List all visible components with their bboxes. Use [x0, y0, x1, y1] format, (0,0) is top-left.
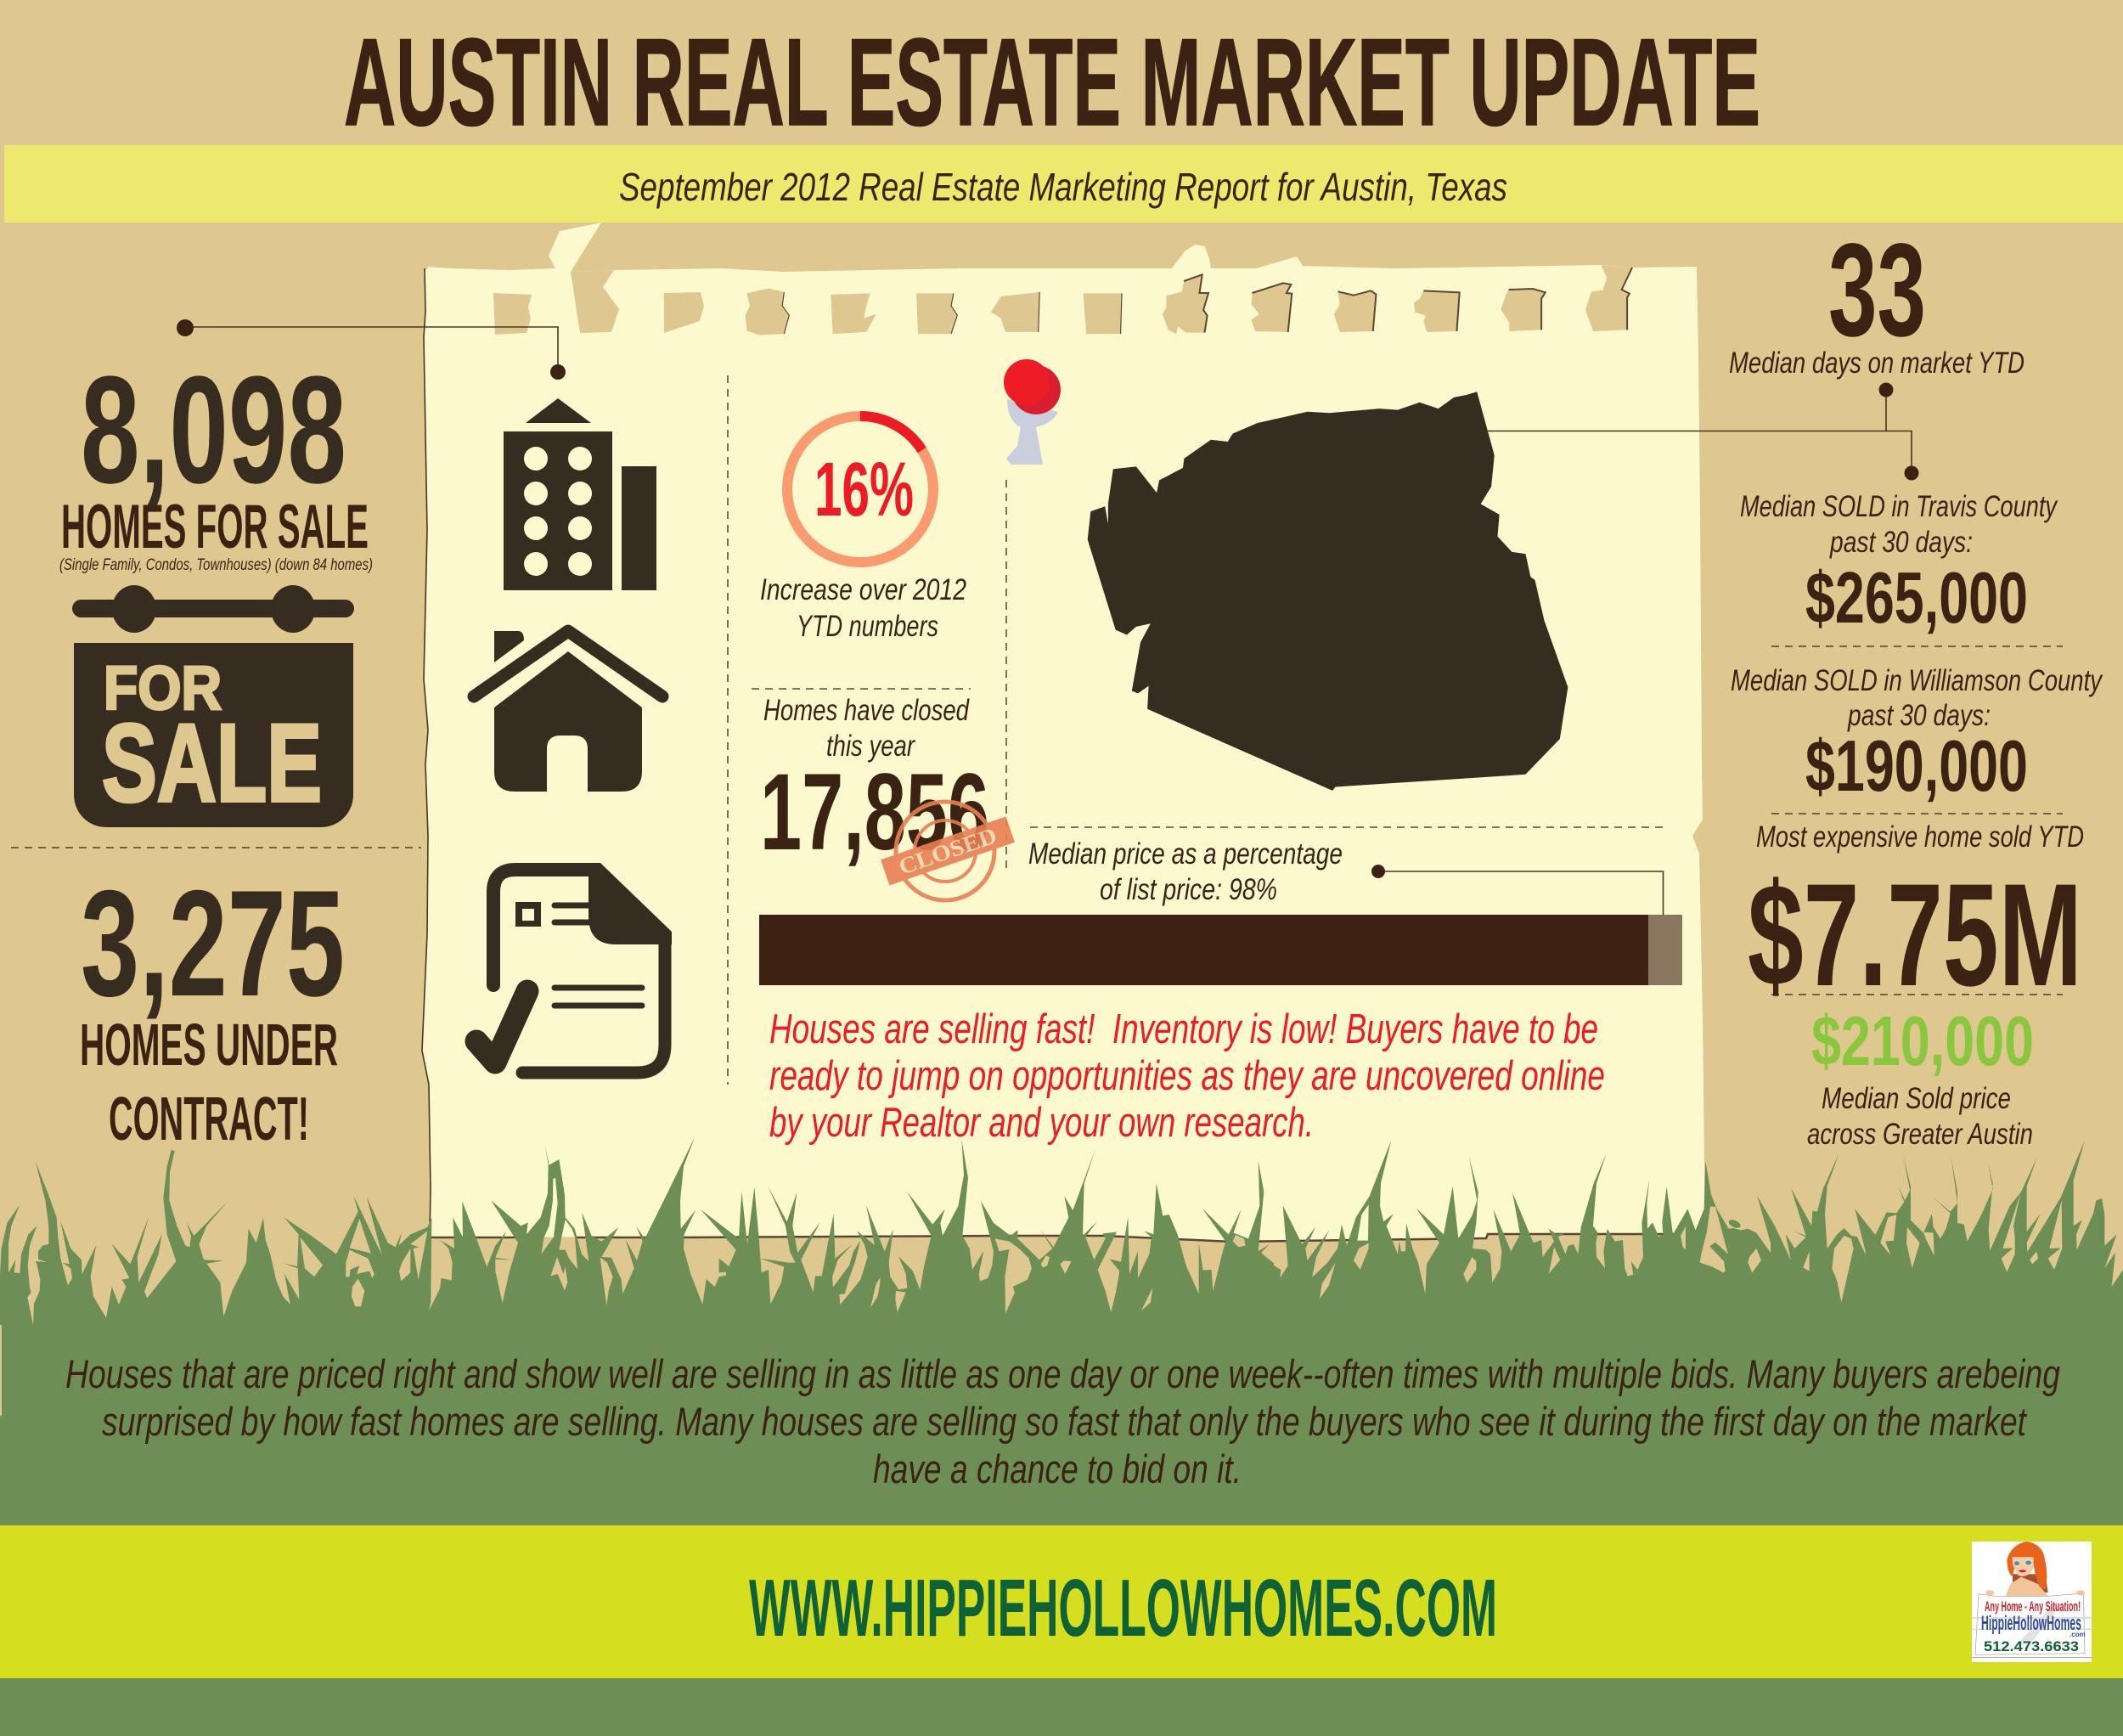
callout: houses are selling fast: ready to jump on opportunities as they are uncovered online — [769, 1053, 1605, 1099]
text: increase over 2012: Increase over 2012 — [760, 573, 966, 606]
connector: map to right-hand stats — [1488, 382, 1919, 481]
text: homes have closed — [763, 694, 970, 763]
website url: WWW.HIPPIEHOLLOWHOMES.COM — [749, 1563, 1497, 1654]
text: bottom paragraph: have a chance to bid on it. — [873, 1446, 1242, 1491]
donut chart: 16 percent: 16% — [814, 448, 914, 533]
callout: houses are selling fast — [769, 1006, 1605, 1146]
text: increase over 2012 — [760, 573, 966, 643]
text: homes have closed: Homes have closed — [763, 694, 970, 727]
stat: Williamson County: $190,000 — [1805, 726, 2028, 807]
icon: house — [474, 631, 662, 792]
logo: Hippie Hollow Homes — [1972, 1542, 2092, 1662]
stat: Travis County: past 30 days: — [1829, 526, 1973, 559]
stat: homes closed: 17,856 — [760, 752, 989, 873]
text: homes have closed: this year — [826, 730, 915, 763]
subtitle band — [4, 145, 2123, 223]
stat: median days on market: 33 — [1828, 217, 1926, 364]
stat: Williamson County — [1731, 664, 2103, 807]
left edge sliver — [0, 1325, 2, 1416]
stat: median days on market: Median days on market YTD — [1729, 347, 2024, 380]
grass — [0, 1136, 2123, 1736]
dashed dividers — [11, 375, 2063, 1085]
stat: median sold price: across Greater Austin — [1807, 1118, 2033, 1151]
icon: document with check mark — [476, 863, 672, 1073]
icon: building — [504, 398, 656, 590]
stat: homes under contract — [80, 859, 345, 1153]
paper torn edge lines — [422, 268, 431, 1237]
note: property types: (Single Family, Condos, Townhouses) (down 84 homes) — [59, 556, 373, 574]
label: contract: CONTRACT! — [109, 1085, 309, 1153]
icon: for sale sign: SALE — [102, 701, 322, 825]
logo: Hippie Hollow Homes: .com — [2070, 1631, 2086, 1638]
paper tears and punched holes — [493, 265, 1632, 335]
stat: median days on market — [1729, 217, 2024, 380]
stat: Williamson County: past 30 days: — [1847, 699, 1991, 732]
logo: Hippie Hollow Homes: 512.473.6633 — [1984, 1638, 2079, 1654]
label: homes under: HOMES UNDER — [80, 1012, 338, 1078]
panel: footer band — [0, 1525, 2123, 1678]
text: median price percent of list — [1028, 837, 1343, 906]
subtitle: September 2012 Real Estate Marketing Report for Austin, Texas — [619, 165, 1507, 209]
icon: for sale sign: FOR — [104, 655, 222, 723]
stat: median sold price: Median Sold price — [1822, 1082, 2011, 1115]
text: median price percent of list: of list price: 98% — [1100, 873, 1277, 906]
connector: homes for sale to building — [177, 319, 566, 380]
icon: red push pin — [1004, 359, 1061, 465]
connector: list price to bar — [1371, 865, 1663, 915]
callout: houses are selling fast: by your Realtor and your own research. — [769, 1100, 1314, 1146]
text: bottom paragraph — [65, 1351, 2060, 1491]
panel: torn notebook paper — [422, 223, 1704, 1242]
donut chart: 16 percent — [787, 416, 933, 562]
stamp: closed — [881, 802, 1015, 900]
text: increase over 2012: YTD numbers — [797, 610, 938, 643]
stat: homes under contract: 3,275 — [81, 859, 345, 1028]
map: Austin area silhouette — [1088, 392, 1568, 791]
stat: Travis County — [1740, 490, 2058, 639]
callout: houses are selling fast: Houses are selling fast! Inventory is low! Buyers have to be — [769, 1006, 1598, 1052]
label: homes for sale: HOMES FOR SALE — [61, 493, 369, 561]
bar chart: 98 percent — [759, 915, 1682, 985]
stat: median sold price — [1807, 1001, 2034, 1151]
stat: homes for sale — [59, 345, 373, 574]
text: median price percent of list: Median price as a percentage — [1028, 837, 1343, 871]
stat: Travis County: $265,000 — [1805, 558, 2028, 639]
icon: for sale sign — [72, 585, 354, 827]
stamp: closed: CLOSED — [895, 822, 1000, 880]
stat: median sold price: $210,000 — [1811, 1001, 2034, 1080]
stat: homes for sale: 8,098 — [81, 345, 346, 516]
